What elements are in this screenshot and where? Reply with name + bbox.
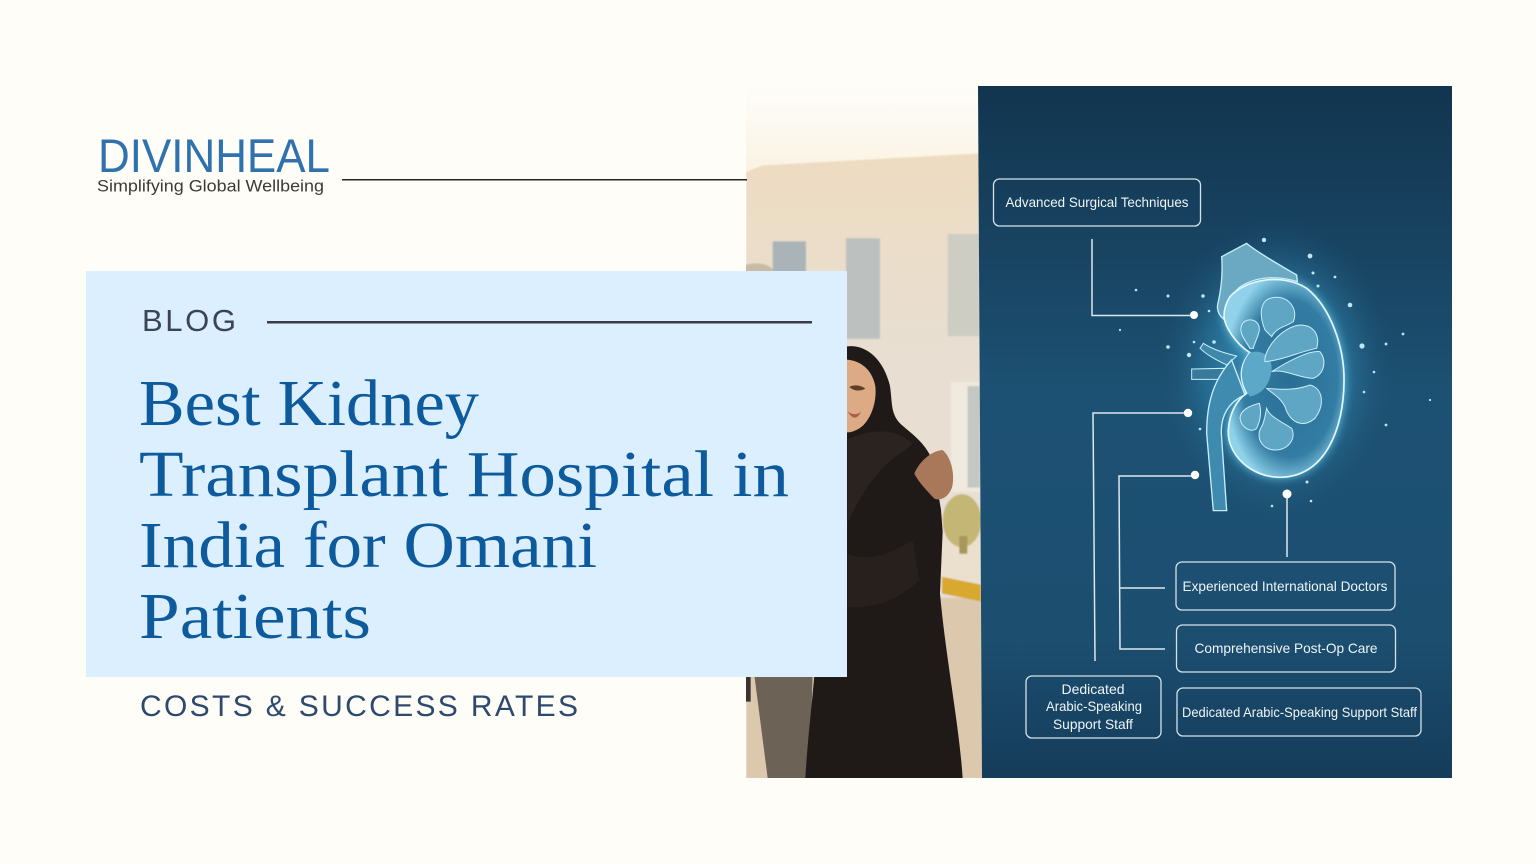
man's trousers <box>754 675 813 778</box>
calyces <box>1240 297 1324 450</box>
label: dedicated support staff, right: Dedicated Arabic-Speaking Support Staff <box>1182 704 1417 720</box>
label: experienced international doctors <box>1176 562 1395 610</box>
panel: navy infographic <box>978 86 1452 778</box>
subtitle: COSTS & SUCCESS RATES <box>140 690 578 723</box>
woman's face <box>847 360 876 432</box>
label: dedicated support staff, left: Dedicated <box>1061 681 1125 697</box>
renal pelvis <box>1242 352 1272 397</box>
photo: patient outside hospital <box>739 86 986 779</box>
title: Transplant Hospital in <box>139 438 789 511</box>
title: Best Kidney <box>139 367 479 440</box>
woman in abaya <box>805 346 963 778</box>
title: Patients <box>139 580 371 653</box>
label: dedicated support staff, right <box>1177 688 1421 736</box>
adrenal gland <box>1217 243 1297 319</box>
label: comprehensive post-op care: Comprehensive Post-Op Care <box>1194 640 1378 656</box>
kidney illustration <box>1157 217 1397 523</box>
logo: Divinheal: Simplifying Global Wellbeing <box>97 176 324 196</box>
connector lines <box>1092 239 1292 661</box>
label: dedicated support staff, left <box>1026 676 1161 738</box>
label: comprehensive post-op care <box>1176 625 1396 672</box>
label: dedicated support staff, left: Support Staff <box>1053 716 1133 732</box>
header rule <box>342 179 747 180</box>
title: India for Omani <box>139 509 597 582</box>
logo: Divinheal: DIVINHEAL <box>98 129 330 182</box>
title <box>139 367 789 653</box>
kidney body <box>1224 280 1344 477</box>
sparkle particles <box>1119 238 1431 507</box>
eyebrow: blog: BLOG <box>142 303 236 338</box>
label: dedicated support staff, left: Arabic-Speaking <box>1046 698 1142 714</box>
hand on shoulder <box>914 450 953 499</box>
label: advanced surgical techniques: Advanced Surgical Techniques <box>1006 194 1188 210</box>
label: advanced surgical techniques <box>994 179 1200 226</box>
panel: title card <box>86 271 847 677</box>
label: experienced international doctors: Experienced International Doctors <box>1182 578 1388 594</box>
ureter and vessels <box>1200 343 1237 365</box>
